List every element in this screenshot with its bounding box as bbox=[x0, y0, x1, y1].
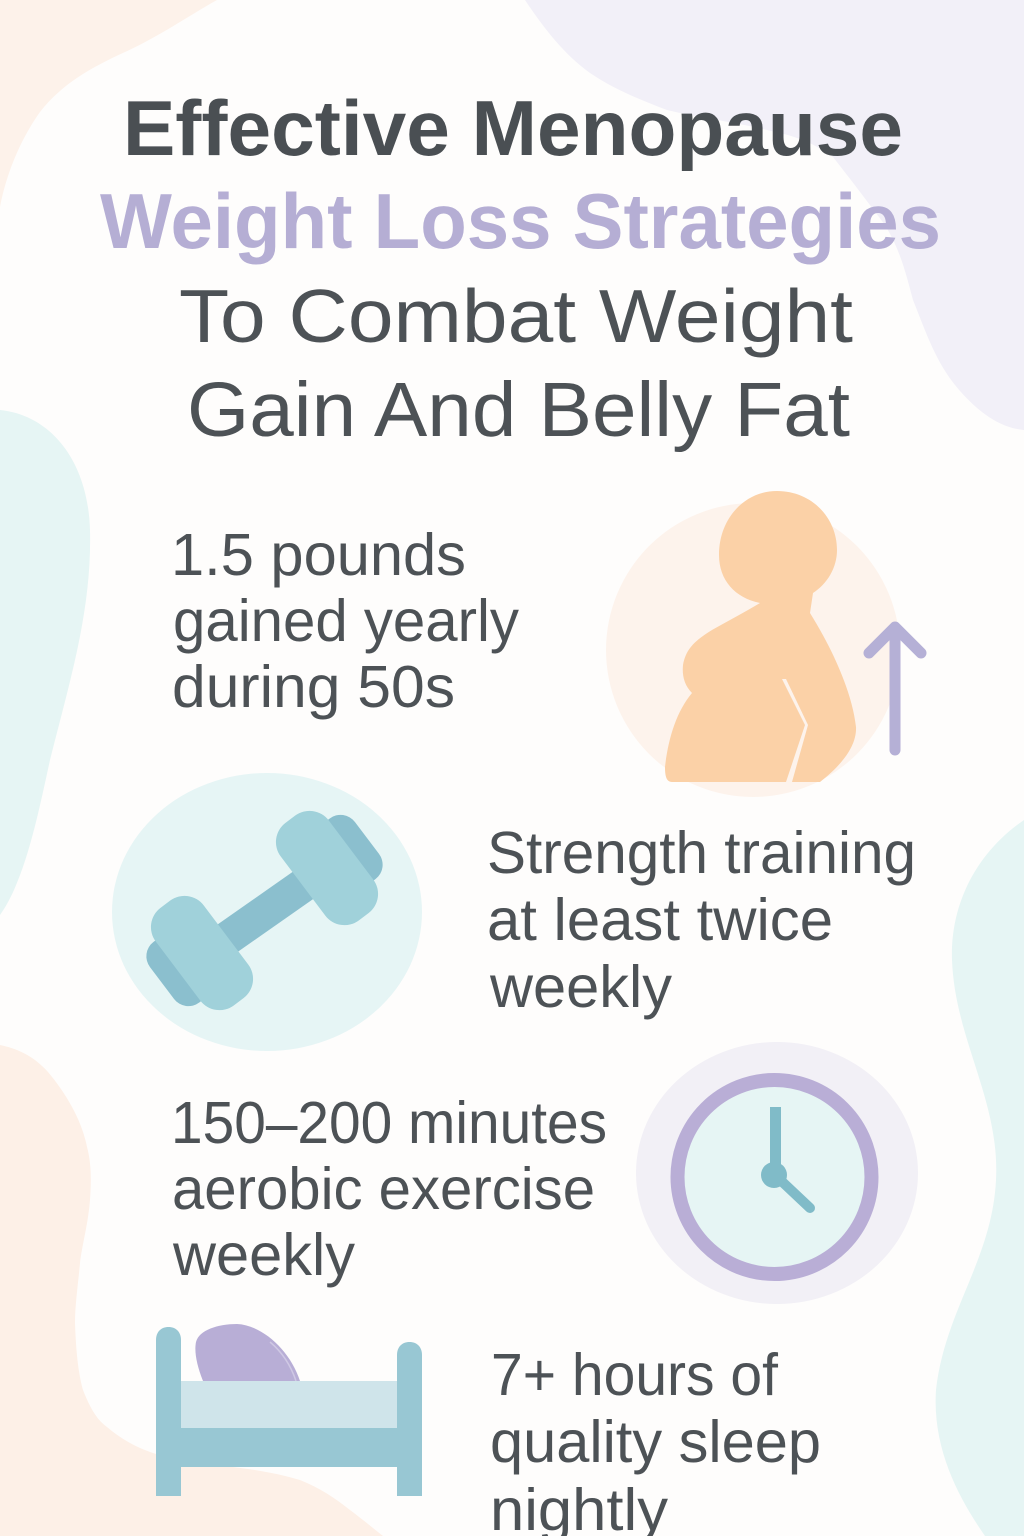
text: strength training: Strength training bbox=[487, 820, 916, 886]
text: quality sleep: quality sleep bbox=[490, 1409, 821, 1475]
title: To Combat Weight bbox=[179, 274, 853, 358]
icon: dumbbell bbox=[112, 773, 422, 1051]
icon: bed bbox=[156, 1324, 422, 1496]
title: Gain And Belly Fat bbox=[187, 367, 850, 453]
text: strength training bbox=[487, 820, 916, 1020]
title: Weight Loss Strategies bbox=[100, 177, 941, 265]
text: aerobic exercise bbox=[171, 1090, 607, 1288]
text: quality sleep: 7+ hours of bbox=[491, 1342, 779, 1408]
text: aerobic exercise: aerobic exercise bbox=[172, 1156, 595, 1222]
text: pounds gained: gained yearly bbox=[173, 588, 519, 654]
text: pounds gained: during 50s bbox=[172, 654, 455, 720]
title: Effective Menopause bbox=[123, 84, 903, 172]
title bbox=[100, 84, 941, 453]
text: pounds gained bbox=[171, 522, 519, 720]
icon: clock bbox=[636, 1042, 918, 1304]
text: strength training: at least twice bbox=[487, 887, 833, 953]
text: aerobic exercise: weekly bbox=[172, 1222, 356, 1288]
icon: belly silhouette with arrow bbox=[606, 491, 921, 797]
text: quality sleep bbox=[490, 1342, 821, 1536]
text: aerobic exercise: 150–200 minutes bbox=[171, 1090, 607, 1156]
text: strength training: weekly bbox=[489, 954, 673, 1020]
text: pounds gained: 1.5 pounds bbox=[171, 522, 466, 588]
